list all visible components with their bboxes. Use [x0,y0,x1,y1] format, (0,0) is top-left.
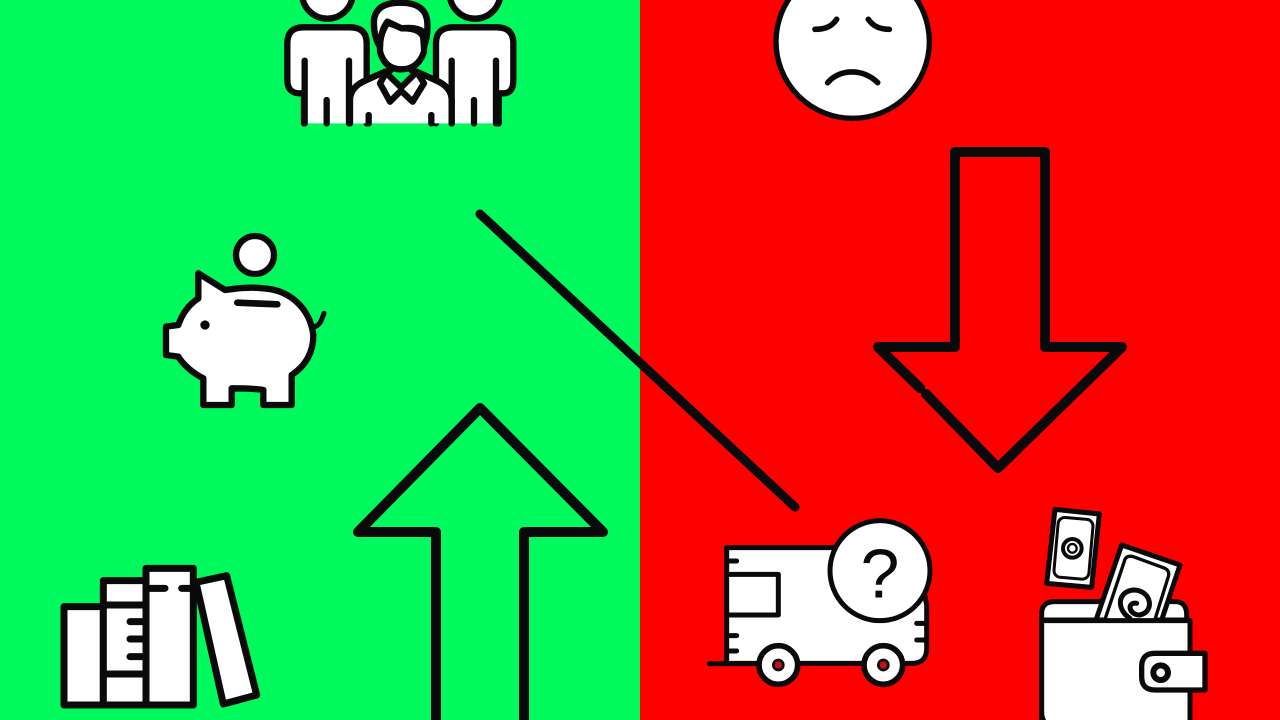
question mark: ? [861,535,899,613]
pig tail [315,313,324,327]
coin [236,236,274,274]
coin slot [237,303,277,304]
icon: group of people [287,0,513,123]
small bill [1047,509,1099,587]
clasp [1142,653,1205,690]
icon: up arrow [358,408,603,720]
icon: wallet with money [1042,509,1205,720]
wallet front [1042,621,1190,720]
icon: down arrow [878,152,1122,468]
wheels [759,646,798,684]
pig eye [200,320,210,330]
icon: delivery truck with question mark [709,521,930,684]
icon: piggy bank with coin [166,236,324,405]
panel: red negative side [640,0,1280,720]
wallet back [1042,602,1187,620]
large bill [1096,545,1180,620]
panel: green positive side [0,0,640,720]
diagonal divider line [480,214,795,507]
icon: books [64,568,257,705]
pig body [166,273,313,405]
icon: sad face [776,0,929,118]
